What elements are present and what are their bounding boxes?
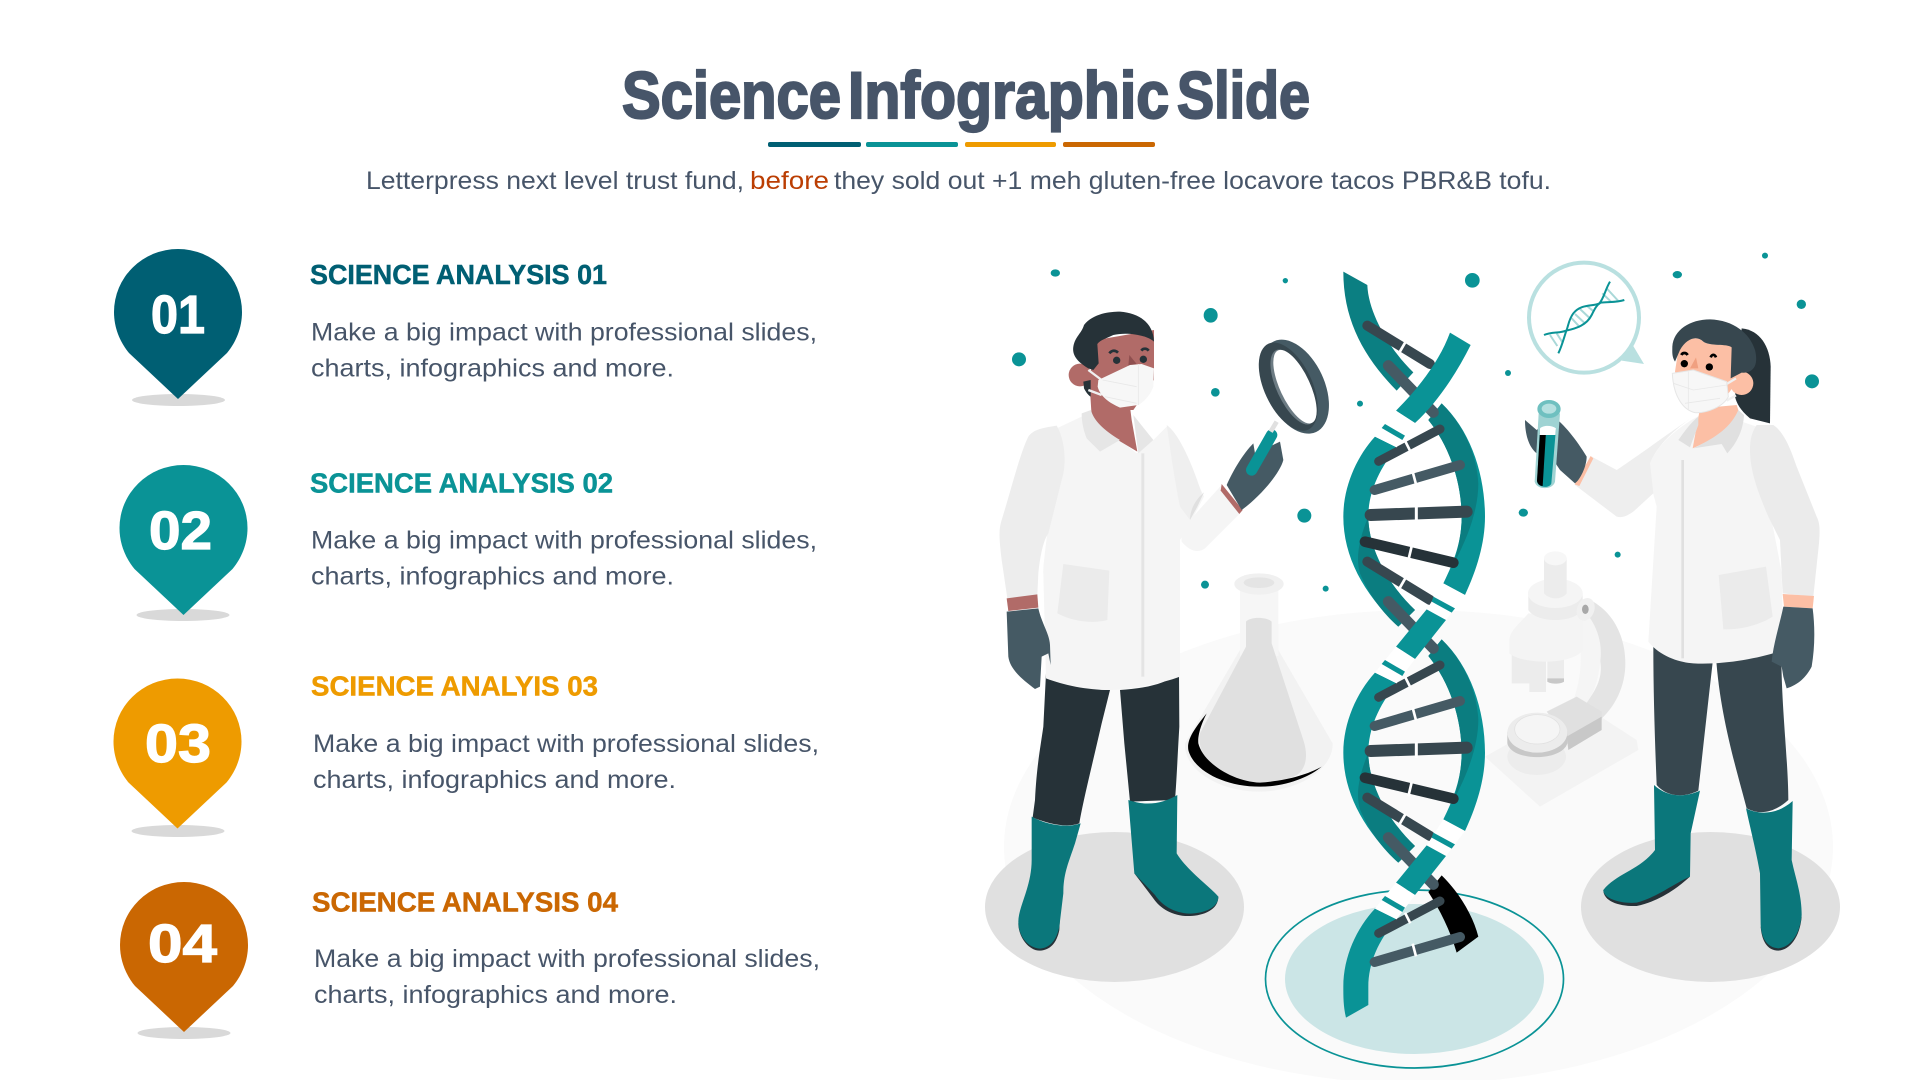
body text 03: charts, infographics and more.: [313, 766, 676, 794]
illustration: male scientist: [1000, 312, 1343, 951]
body text 02: Make a big impact with professional slides,: [311, 526, 817, 554]
dna rungs: [1365, 326, 1467, 962]
pin 01: 01: [151, 285, 205, 345]
lab coat: [1575, 415, 1820, 664]
heading 04: SCIENCE ANALYSIS 04: [312, 886, 619, 918]
pin 02: [120, 465, 248, 621]
subtitle: Letterpress next level trust fund,: [366, 167, 744, 195]
heading 02: SCIENCE ANALYSIS 02: [310, 468, 613, 498]
illustration: DNA helix: [1343, 272, 1485, 1018]
dna crossings and white bands: [1375, 333, 1471, 919]
heading 01: SCIENCE ANALYSIS 01: [310, 259, 607, 290]
title underline bars: [768, 142, 1155, 147]
lab coat: [1000, 417, 1240, 690]
test tube: [1535, 400, 1561, 488]
cuffs and gloves: [1525, 417, 1814, 688]
head: [1672, 319, 1756, 413]
illustration: microscope: [1485, 551, 1638, 807]
panel: science analysis 04: [120, 882, 820, 1039]
title: [622, 58, 1310, 132]
body text 01: [311, 318, 817, 382]
face mask: [1088, 364, 1154, 408]
magnifying glass: [1247, 329, 1343, 470]
pin 01: [114, 249, 242, 406]
subtitle: [366, 167, 1551, 195]
panel: science analysis 02: [120, 465, 817, 621]
pin 03: [114, 678, 242, 837]
body text 04: charts, infographics and more.: [314, 981, 677, 1009]
title: Science: [622, 58, 841, 132]
pin 02: 02: [149, 501, 212, 561]
trousers and boots: [1018, 673, 1218, 951]
illustration: flask: [1185, 573, 1333, 792]
head: [1069, 312, 1154, 410]
body text 01: Make a big impact with professional slides,: [311, 318, 817, 346]
trousers and boots: [1603, 647, 1802, 951]
dna ribbons: right arcs: [1428, 403, 1485, 953]
subtitle: before: [750, 167, 829, 195]
body text 02: charts, infographics and more.: [311, 562, 674, 590]
panel: science analysis 01: [114, 249, 817, 406]
title: Infographic: [848, 58, 1169, 132]
body text 02: [311, 526, 817, 590]
face mask: [1672, 370, 1736, 413]
hair back: [1735, 328, 1771, 423]
body text 03: Make a big impact with professional slides,: [313, 730, 819, 758]
body text 03: [313, 730, 819, 794]
illustration: female scientist: [1525, 263, 1820, 951]
heading 03: SCIENCE ANALYIS 03: [311, 670, 598, 702]
speech bubble with small dna: [1529, 263, 1644, 373]
illustration: floating dots: [1012, 253, 1819, 592]
panel: science analysis 03: [114, 670, 819, 837]
pin 04: [120, 882, 248, 1039]
neck and collar: [1678, 405, 1744, 453]
body text 04: [314, 945, 820, 1009]
subtitle: they sold out +1 meh gluten-free locavore tacos PBR&B tofu.: [834, 167, 1551, 195]
pin 04: 04: [148, 914, 217, 974]
body text 04: Make a big impact with professional slides,: [314, 945, 820, 973]
dna ribbons: left arcs: [1343, 272, 1415, 1018]
illustration: floor: [985, 610, 1840, 1080]
body text 01: charts, infographics and more.: [311, 354, 674, 382]
pin 03: 03: [145, 714, 211, 774]
title: Slide: [1177, 58, 1310, 132]
neck and collar: [1082, 390, 1153, 453]
cuffs and gloves: [1007, 442, 1283, 689]
